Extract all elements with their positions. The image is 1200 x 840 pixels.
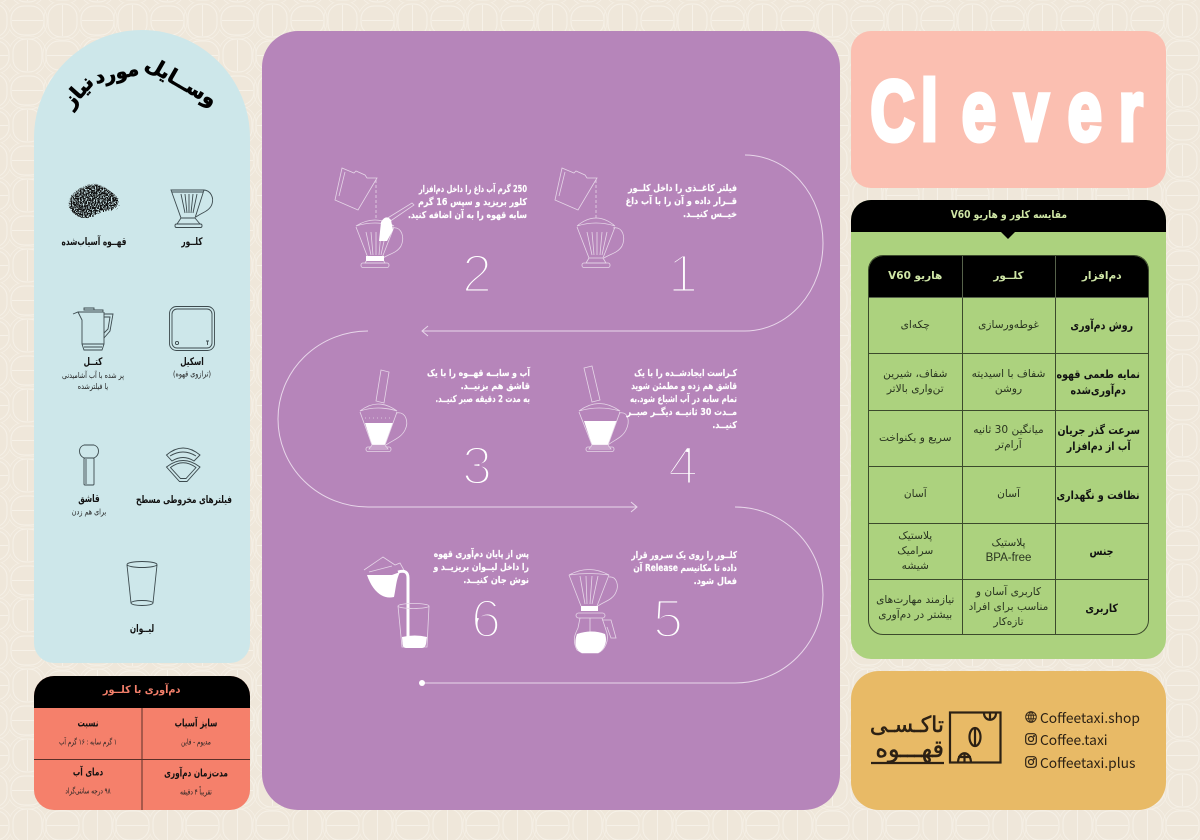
cell: water temperature: دمای آب (73, 766, 103, 778)
row: flow speed: میانگین 30 ثانیه (973, 424, 1044, 436)
icon: flat cone filters (166, 448, 200, 482)
step 2 text: سابه قهوه را به آن اضافه کنید. (408, 210, 527, 221)
row: flow speed: آب از دم‌افزار (1066, 439, 1130, 453)
cell: ratio (59, 718, 117, 747)
row: material: پلاستیک (991, 537, 1026, 549)
step 3 text (427, 366, 530, 405)
row: flow speed (879, 423, 1140, 453)
step 5 text: داده تا مکانیسم Release آن (633, 563, 737, 574)
logo: coffee taxi: قهـــوه (875, 735, 944, 763)
panel: clever vs hario v60 comparison (851, 200, 1166, 659)
step 2 number: 2 (462, 244, 492, 304)
step 4 text: تمام سابه در آب اشباع شود.به (630, 394, 737, 405)
step 6 text: پس از پایان دم‌آوری قهوه (434, 549, 529, 560)
label: spoon: قاشق (78, 493, 100, 505)
row: material: سرامیک (897, 544, 933, 556)
panel: brewing steps (262, 31, 840, 810)
note: kettle water: یا فیلترشده (78, 382, 108, 391)
comparison table (868, 255, 1149, 635)
table header row: هاریو V60 (888, 270, 942, 282)
row: flavor profile: شفاف با اسیدیته (972, 368, 1045, 380)
step 4 text: کنیــد. (712, 420, 737, 431)
row: usage: کاربری آسان و (976, 586, 1041, 598)
cell: ratio: نسبت (77, 718, 99, 730)
step 1 text: فیلتر کاغــذی را داخل کلــور (628, 183, 737, 194)
icon: clever dripper (170, 190, 214, 228)
note: for stirring: برای هم زدن (72, 508, 106, 516)
divider lines (34, 708, 250, 810)
cell: grind size: مدیوم - فاین (181, 738, 211, 746)
cell: ratio: ۱ گرم سابه : ۱۶ گرم آب (59, 738, 117, 746)
row: flavor profile: دم‌آوری‌شده (1070, 382, 1125, 396)
row: usage: تازه‌کار (993, 616, 1024, 628)
step 6 text (433, 548, 529, 586)
step 5 icon: release over server (568, 569, 618, 654)
step 6 text: نوش جان کنیــد. (463, 575, 529, 586)
step 2 text: 250 گرم آب داغ را داخل دم‌افزار (419, 184, 527, 195)
heading: tools needed, curved (57, 51, 222, 114)
row: flavor profile: روشن (995, 382, 1022, 394)
step 3 icon: stir (360, 370, 408, 452)
row: cleaning: نظافت و نگهداری (1056, 488, 1139, 502)
cell: water temperature: ۹۸ درجه سانتی‌گراد (65, 786, 111, 796)
contact: website: Coffeetaxi.shop (1040, 707, 1140, 727)
label: ground coffee: قهــوه آسیاب‌شده (62, 236, 126, 248)
contact: instagram: Coffee.taxi (1040, 729, 1108, 749)
table header row: کلــور (993, 270, 1024, 282)
logo: coffee taxi: تاکـسـی (870, 713, 944, 738)
step 5 number: 5 (653, 589, 683, 649)
row: brew method: غوطه‌ورسازی (978, 318, 1039, 330)
row: material: پلاستیک (898, 530, 932, 542)
panel: brewing with clever (34, 676, 250, 810)
label: scale: اسکیل (180, 356, 204, 368)
step 1 text (626, 183, 737, 220)
step 6 icon: pour into glass (364, 556, 430, 648)
label: clever: کلــور (181, 236, 203, 248)
cell: grind size (175, 716, 217, 747)
row: flow speed: آرام‌تر (995, 439, 1022, 451)
title: Clever: Clever (870, 63, 1143, 158)
row: cleaning: آسان (904, 488, 927, 500)
heading: tools needed, curved: نیاز (57, 70, 98, 113)
row: flow speed: سریع و یکنواخت (879, 432, 952, 444)
heading: tools needed, curved: مورد (93, 58, 141, 89)
row: material: جنس (1090, 544, 1114, 558)
step 1 text: خیــس کنیــد. (683, 209, 737, 220)
logo: coffee taxi (870, 711, 1002, 765)
row: flavor profile: نمایه طعمی قهوه (1056, 366, 1139, 380)
row: material (869, 523, 1148, 579)
row: material: BPA-free (986, 552, 1031, 564)
row: flow speed: سرعت گذر جریان (1057, 423, 1140, 437)
cell: water temperature (65, 766, 111, 796)
step 5 text: فعال شود. (694, 576, 737, 587)
row: usage (869, 579, 1148, 636)
row: material: شیشه (902, 560, 929, 572)
step 6 number: 6 (471, 589, 501, 649)
heading: tools needed, curved: وســایل (141, 51, 222, 111)
note: coffee scale: (ترازوی قهوه) (173, 370, 211, 378)
step 3 number: 3 (462, 436, 492, 496)
note: kettle water (62, 370, 124, 392)
step 2 icon: add coffee (334, 168, 414, 268)
step 4 text: قاشق هم زده و مطمئن شوید (631, 381, 737, 392)
note: kettle water: پر شده با آب آشامیدنی (62, 371, 124, 380)
panel: clever title (851, 31, 1166, 188)
flow path with arrows (278, 154, 824, 686)
step 2 text: کلور بریزید و سپس 16 گرم (418, 197, 527, 208)
row: flavor profile: تن‌واری بالاتر (887, 382, 944, 394)
step 3 text: به مدت 2 دقیقه صبر کنیــد. (435, 394, 530, 405)
row: flavor profile: شفاف، شیرین (883, 368, 947, 380)
cell: brew time (164, 766, 228, 797)
notch arrow (1001, 232, 1015, 239)
step 1 icon: wet filter (554, 168, 624, 268)
step 1 text: قــرار داده و آن را با آب داغ (626, 196, 737, 207)
row: cleaning (904, 486, 1139, 502)
icon: stirring spoon (79, 444, 99, 486)
cell: brew time: تقریباً ۴ دقیقه (180, 788, 212, 796)
step 2 text (408, 182, 528, 221)
icon: scale (169, 306, 215, 351)
step 3 text: آب و سابــه قهــوه را با یک (427, 368, 530, 379)
step 5 text: کلــور را روی یک سـرور قرار (631, 550, 737, 561)
heading: comparison (851, 200, 1166, 232)
step 4 number: 4 (668, 436, 698, 496)
row: flavor profile (883, 366, 1140, 397)
step 4 text: مــدت 30 ثانیــه دیگــر صبــر (627, 407, 737, 418)
contact: instagram plus: Coffeetaxi.plus (1040, 752, 1135, 772)
panel: brand and contact (851, 671, 1166, 810)
label: kettle: کتــل (84, 356, 102, 368)
label: glass: لیــوان (130, 623, 154, 635)
row: usage: نیازمند مهارت‌های (876, 594, 954, 606)
heading: brewing with clever (34, 676, 250, 708)
row: brew method (901, 318, 1133, 332)
icon: kettle (72, 308, 114, 350)
heading: comparison: مقایسه کلور و هاریو V60 (950, 209, 1067, 221)
row: brew method: چکه‌ای (901, 318, 930, 330)
step 3 text: قاشق هم بزنیــد. (461, 381, 530, 392)
row: cleaning: آسان (997, 488, 1020, 500)
heading: brewing with clever: دم‌آوری با کلــور (103, 684, 181, 696)
row: brew method: روش دم‌آوری (1070, 318, 1133, 332)
row: usage: کاربری (1085, 601, 1118, 615)
step 4 text: کـراست ایجادشــده را با یک (634, 368, 737, 379)
icon: ground coffee (68, 183, 120, 219)
step 4 icon: crust stir (578, 366, 629, 452)
step 5 text (631, 550, 738, 587)
step 6 text: را داخل لیــوان بریزیــد و (434, 562, 529, 573)
icon: glass (126, 561, 158, 606)
table header row: دم‌افزار (1082, 270, 1122, 282)
panel: tools needed (34, 30, 250, 663)
table header row (869, 256, 1148, 628)
cell: brew time: مدت‌زمان دم‌آوری (164, 768, 228, 780)
row: usage: مناسب برای افراد (969, 601, 1048, 613)
label: flat cone filters: فیلترهای مخروطی مسطح (136, 494, 232, 506)
step 1 number: 1 (668, 244, 698, 304)
step 4 text (626, 368, 738, 431)
cell: grind size: سایز آسیاب (175, 718, 217, 730)
row: usage: بیشتر در دم‌آوری (878, 609, 952, 621)
